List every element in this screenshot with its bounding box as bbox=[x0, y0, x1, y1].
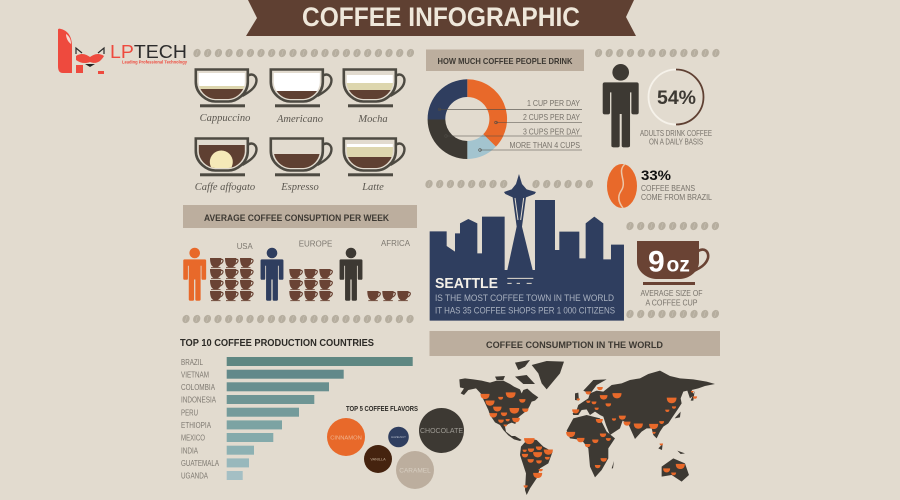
cup: Latte: Latte bbox=[361, 182, 384, 193]
bubble chart: top 5 coffee flavors: CHOCOLATE bbox=[420, 428, 463, 435]
bar chart: production countries: INDIA bbox=[181, 446, 199, 455]
donut chart: 3 CUPS PER DAY bbox=[523, 126, 580, 136]
stat: 54% adults: ON A DAILY BASIS bbox=[649, 136, 703, 146]
cup: Mocha: Mocha bbox=[357, 114, 388, 125]
cup: Mocha bbox=[342, 70, 404, 125]
stat: 33% coffee beans: COME FROM BRAZIL bbox=[641, 192, 712, 202]
stat: 9oz cup bbox=[637, 241, 708, 308]
stat: 33% coffee beans: COFFEE BEANS bbox=[641, 183, 695, 193]
stat: 9oz cup: AVERAGE SIZE OF bbox=[640, 288, 702, 298]
stat: 54% adults bbox=[603, 64, 712, 147]
region: USA: USA bbox=[237, 241, 253, 251]
stat: 9oz cup: oz bbox=[666, 254, 690, 276]
stat: 33% coffee beans bbox=[607, 164, 712, 208]
heading: coffee consumption in the world: COFFEE CONSUMPTION IN THE WORLD bbox=[486, 340, 663, 351]
seattle skyline panel: SEATTLE bbox=[435, 276, 498, 292]
region: USA bbox=[183, 241, 253, 301]
cup: Latte bbox=[342, 138, 404, 193]
logo: LPTECH: LPTECH bbox=[110, 42, 187, 62]
heading: average coffee consumption: AVERAGE COFFEE CONSUPTION PER WEEK bbox=[204, 213, 389, 224]
bubble chart: top 5 coffee flavors: VANILLA bbox=[370, 458, 386, 462]
logo: LPTECH: Leading Professional Technology bbox=[122, 60, 188, 64]
map: orange cup markers bbox=[480, 387, 697, 488]
title banner: COFFEE INFOGRAPHIC bbox=[302, 2, 580, 32]
heading: coffee consumption in the world bbox=[430, 331, 720, 356]
heading: average coffee consumption bbox=[183, 205, 417, 228]
donut chart: MORE THAN 4 CUPS bbox=[510, 140, 580, 150]
seattle skyline panel bbox=[430, 174, 624, 321]
region: Africa: AFRICA bbox=[381, 238, 410, 248]
bean divider: top right bbox=[594, 48, 721, 58]
cup: Americano: Americano bbox=[276, 114, 323, 125]
bar chart: production countries: VIETNAM bbox=[181, 370, 209, 380]
region: Europe: EUROPE bbox=[299, 239, 333, 249]
stat: 54% adults: ADULTS DRINK COFFEE bbox=[640, 128, 712, 138]
bubble chart: top 5 coffee flavors: CARAMEL bbox=[399, 468, 431, 474]
seattle skyline panel: IT HAS 35 COFFEE SHOPS PER 1 000 CITIZENS bbox=[435, 306, 615, 316]
cup: Caffe affogato bbox=[194, 138, 256, 193]
cup: Espresso: Espresso bbox=[280, 182, 319, 193]
region: Africa bbox=[340, 238, 410, 301]
heading: how much coffee people drink: HOW MUCH COFFEE PEOPLE DRINK bbox=[438, 56, 573, 66]
stat: 9oz cup: 9 bbox=[648, 246, 665, 278]
stat: 54% adults: 54% bbox=[657, 88, 696, 109]
bean divider: right lower bbox=[625, 309, 720, 319]
cup: Espresso bbox=[269, 138, 331, 193]
bean divider: beside seattle top bbox=[424, 179, 594, 189]
stat: 33% coffee beans: 33% bbox=[641, 167, 672, 183]
region: Europe bbox=[261, 239, 333, 301]
title banner bbox=[246, 0, 636, 36]
bar chart: production countries: INDONESIA bbox=[181, 396, 217, 405]
stat: 9oz cup: A COFFEE CUP bbox=[646, 298, 698, 308]
donut chart: 1 CUP PER DAY bbox=[527, 98, 580, 108]
bean divider: top left bbox=[192, 48, 415, 58]
logo: LPTECH bbox=[58, 29, 188, 74]
map: landmasses bbox=[459, 360, 715, 495]
bubble chart: top 5 coffee flavors: CINNAMON bbox=[330, 436, 362, 442]
cup: Cappuccino bbox=[194, 70, 256, 124]
world map bbox=[459, 360, 715, 495]
cup: Cappuccino: Cappuccino bbox=[200, 113, 250, 124]
heading: top 10 production: TOP 10 COFFEE PRODUCTION COUNTRIES bbox=[180, 338, 374, 349]
bubble chart: top 5 coffee flavors bbox=[327, 406, 464, 489]
cup: Americano bbox=[269, 70, 331, 125]
bar chart: production countries: BRAZIL bbox=[181, 358, 203, 367]
bubble chart: top 5 coffee flavors: TOP 5 COFFEE FLAVORS bbox=[346, 406, 418, 413]
donut chart: 2 CUPS PER DAY bbox=[523, 112, 580, 122]
heading: how much coffee people drink bbox=[426, 50, 584, 71]
bar chart: production countries: ETHIOPIA bbox=[181, 421, 212, 430]
bar chart: production countries: PERU bbox=[181, 408, 198, 417]
bubble chart: top 5 coffee flavors: HAZELNUT bbox=[391, 435, 406, 439]
bar chart: production countries: MEXICO bbox=[181, 434, 205, 443]
bar chart: production countries: UGANDA bbox=[181, 472, 209, 481]
bar chart: production countries bbox=[181, 357, 413, 481]
donut chart bbox=[428, 79, 582, 159]
bean divider: below consumption bbox=[181, 314, 415, 324]
bean divider: right middle bbox=[625, 221, 720, 231]
seattle skyline panel: IS THE MOST COFFEE TOWN IN THE WORLD bbox=[435, 293, 614, 304]
bar chart: production countries: COLOMBIA bbox=[181, 383, 216, 392]
cup: Caffe affogato: Caffe affogato bbox=[195, 182, 255, 193]
bar chart: production countries: GUATEMALA bbox=[181, 459, 220, 468]
